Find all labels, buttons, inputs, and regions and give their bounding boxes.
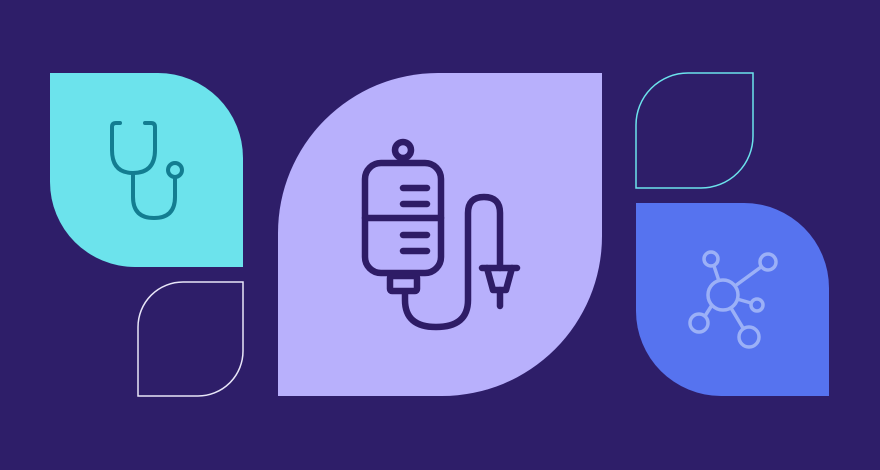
icon: network xyxy=(690,252,776,347)
panel: cyan outline leaf top-right xyxy=(636,73,753,188)
panel: blue leaf with network xyxy=(636,203,829,396)
icon: IV bag xyxy=(365,142,517,327)
panel: lavender leaf with IV bag xyxy=(278,73,602,396)
panel: outline leaf bottom-left xyxy=(138,282,243,396)
panel: cyan leaf with stethoscope xyxy=(50,73,243,267)
icon: stethoscope xyxy=(112,123,182,218)
